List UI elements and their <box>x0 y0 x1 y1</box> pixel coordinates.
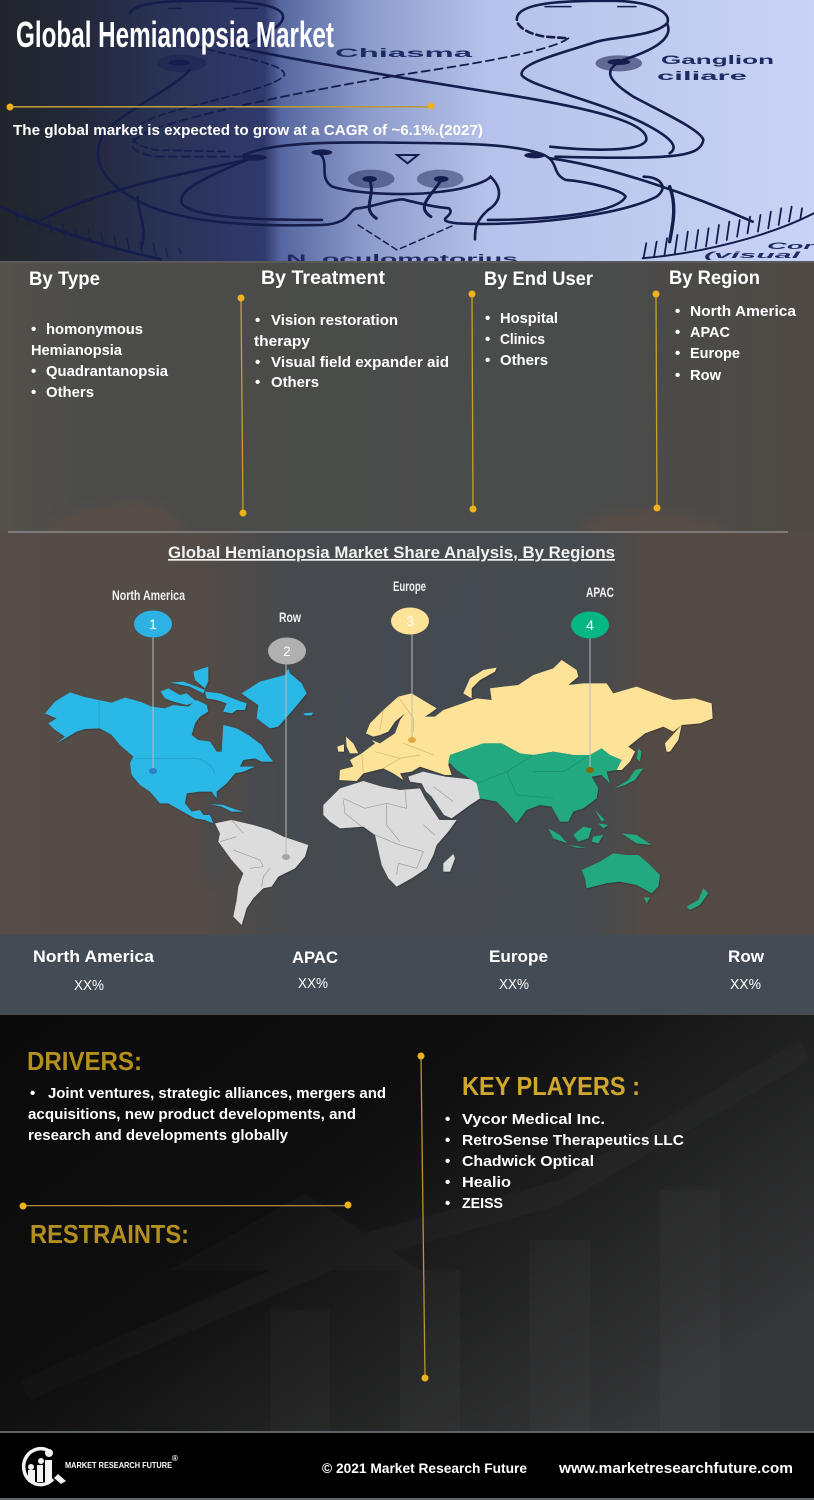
value: North America <box>33 947 155 994</box>
column: by treatment: • <box>255 354 260 371</box>
value: APAC: XX% <box>298 975 328 992</box>
diagram labels: ciliare <box>657 69 748 83</box>
panel: footer <box>0 1431 814 1500</box>
column: by region: • <box>675 324 680 341</box>
background: blurred bars <box>205 575 474 880</box>
key players: • <box>445 1132 450 1149</box>
drivers: DRIVERS: <box>27 1046 142 1076</box>
drivers: acquisitions, new product developments, and <box>28 1106 356 1123</box>
column: by end user: • <box>485 310 490 327</box>
marker: APAC: APAC <box>586 584 614 600</box>
column: by type: Others <box>46 384 94 401</box>
diagram labels: N. oculomotorius <box>286 252 519 266</box>
logo: Market Research Future: ® <box>172 1454 178 1463</box>
key players: Chadwick Optical <box>462 1153 594 1170</box>
background: blurred fingertip <box>40 502 735 535</box>
logo: Market Research Future <box>24 1449 178 1485</box>
region: Europe and Russia <box>337 660 713 781</box>
column: by treatment: Visual field expander aid <box>271 354 449 371</box>
key players: • <box>445 1195 450 1212</box>
logo: Market Research Future: MARKET RESEARCH FUTURE <box>65 1461 173 1470</box>
leader lines <box>153 634 590 857</box>
column: by region: Row <box>690 367 721 384</box>
panel: market segmentation section <box>0 261 814 535</box>
marker: APAC <box>571 584 614 638</box>
value: Row <box>728 947 765 993</box>
gold vertical dividers <box>238 290 660 516</box>
column: by type: By Type <box>29 269 100 290</box>
key players: KEY PLAYERS : <box>462 1071 640 1101</box>
column: by end user: Clinics <box>500 331 545 348</box>
column: by type <box>29 269 169 401</box>
column: by type: • <box>31 363 36 380</box>
region: Africa and Middle East <box>323 772 480 887</box>
column: by treatment: • <box>255 312 260 329</box>
column: by type: • <box>31 384 36 401</box>
value: North America: North America <box>33 947 155 966</box>
diagram labels <box>286 46 814 266</box>
column: by type: homonymous <box>46 321 143 338</box>
key players: Healio <box>462 1174 511 1191</box>
title: Global Hemianopsia Market <box>16 14 334 55</box>
column: by region: North America <box>690 303 797 320</box>
column: by treatment: • <box>255 374 260 391</box>
copyright: © 2021 Market Research Future <box>322 1460 527 1476</box>
gold vertical divider <box>418 1052 428 1382</box>
key players: • <box>445 1174 450 1191</box>
key players: Vycor Medical Inc. <box>462 1111 605 1128</box>
region: APAC <box>448 743 708 910</box>
value: Europe: Europe <box>489 947 548 966</box>
column: by treatment: therapy <box>254 333 311 350</box>
column: by treatment <box>254 268 449 391</box>
key players: • <box>445 1153 450 1170</box>
value: Europe: XX% <box>499 976 529 993</box>
gold horizontal divider <box>20 1202 352 1210</box>
column: by treatment: Others <box>271 374 319 391</box>
column: by region: APAC <box>690 324 730 341</box>
panel: drivers, restraints and key players <box>0 1015 814 1432</box>
marker: Row <box>268 609 306 664</box>
column: by region: Europe <box>690 345 740 362</box>
region: South America <box>215 820 308 925</box>
column: by type: Hemianopsia <box>31 342 123 359</box>
drivers: Joint ventures, strategic alliances, mergers and <box>48 1085 386 1102</box>
drivers <box>27 1046 386 1144</box>
marker: APAC: 4 <box>586 617 594 633</box>
column: by region: • <box>675 367 680 384</box>
map location dots <box>149 737 594 860</box>
column: by end user: Others <box>500 352 548 369</box>
marker: Europe: 3 <box>406 613 414 629</box>
marker: North America: North America <box>112 587 185 603</box>
website: www.marketresearchfuture.com <box>558 1460 793 1477</box>
background: faint growth chart <box>20 1040 810 1432</box>
value: Row: Row <box>728 947 765 966</box>
column: by treatment: Vision restoration <box>271 312 398 329</box>
column: by end user <box>484 269 594 369</box>
diagram labels: Chiasma <box>335 46 473 60</box>
column: by region: • <box>675 345 680 362</box>
key players: RetroSense Therapeutics LLC <box>462 1132 684 1149</box>
column: by end user: • <box>485 352 490 369</box>
header gold divider <box>6 102 434 110</box>
column: by region: • <box>675 303 680 320</box>
value: APAC <box>292 948 338 992</box>
column: by type: Quadrantanopsia <box>46 363 169 380</box>
column: by end user: Hospital <box>500 310 558 327</box>
marker: Europe <box>391 578 429 634</box>
illustration: visual pathway diagram <box>0 1 814 259</box>
diagram labels: (visual <box>704 250 802 260</box>
panel: regional share analysis <box>0 532 814 935</box>
key players <box>445 1071 684 1212</box>
icon: ganglia <box>157 55 642 188</box>
value: North America: XX% <box>74 977 104 994</box>
marker: Row: 2 <box>283 643 291 659</box>
marker: North America <box>112 587 185 638</box>
chart: world map <box>45 660 713 925</box>
column: by type: • <box>31 321 36 338</box>
column: by end user: • <box>485 331 490 348</box>
value: APAC: APAC <box>292 948 338 967</box>
key players: ZEISS <box>462 1195 503 1212</box>
drivers: • <box>30 1085 35 1102</box>
region: North America <box>45 667 313 823</box>
column: by end user: By End User <box>484 269 594 290</box>
heading: share analysis: Global Hemianopsia Market Share Analysis, By Regions <box>168 543 615 562</box>
value: Row: XX% <box>730 976 761 993</box>
panel: header banner <box>0 0 814 266</box>
panel: regional share values <box>0 935 814 1013</box>
marker: Row: Row <box>279 609 301 625</box>
value: Europe <box>489 947 548 993</box>
column: by region: By Region <box>669 268 760 289</box>
column: by region <box>669 268 797 384</box>
diagram labels: Ganglion <box>661 53 774 67</box>
key players: • <box>445 1111 450 1128</box>
CAGR statement: The global market is expected to grow at a CAGR of ~6.1%.(2027) <box>13 122 483 139</box>
column: by treatment: By Treatment <box>261 268 386 289</box>
drivers: research and developments globally <box>28 1127 289 1144</box>
diagram labels: Cor <box>767 241 814 251</box>
marker: Europe: Europe <box>393 578 426 594</box>
marker: North America: 1 <box>149 616 157 632</box>
restraints: RESTRAINTS: <box>30 1219 189 1249</box>
